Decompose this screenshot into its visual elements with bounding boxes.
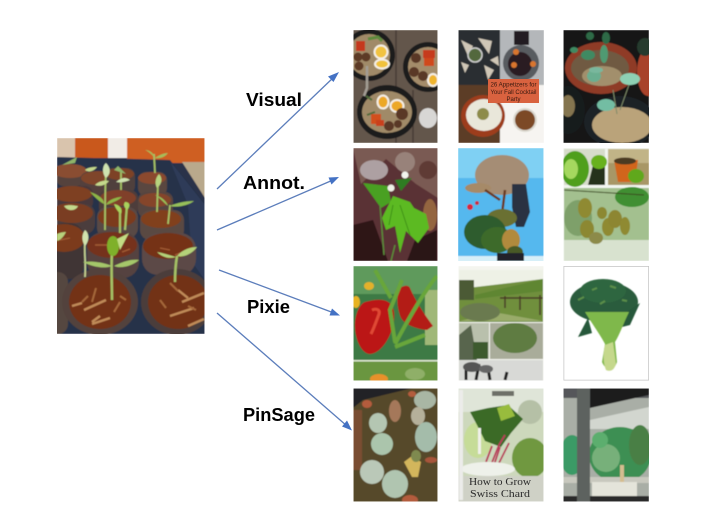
result photo: Pixie 1, red peppers: [352, 266, 438, 384]
figure: retrieval comparison: [57, 30, 649, 502]
appetizers title banner: Party: [506, 97, 521, 103]
result photo: Visual 3, sprouts in pots: [564, 30, 649, 143]
arrow: query to Visual results: [217, 72, 339, 189]
result photo: Annot. 2, bonsai on blue: [458, 148, 544, 262]
result photo: Pixie 3, broccoli on white: [564, 266, 649, 380]
result photo: Visual 1, food bowls: [354, 30, 438, 143]
arrow: query to PinSage results: [217, 313, 352, 430]
arrow: query to Annot. results: [217, 177, 339, 230]
chard title text: How to Grow: [469, 476, 531, 488]
appetizers title banner: 26 Appetizers for: [490, 82, 536, 88]
result photo: PinSage 3, indoor greens under light: [560, 388, 651, 502]
arrow: query to Pixie results: [219, 270, 340, 316]
result photo: PinSage 2, Swiss chard: [458, 388, 548, 502]
result photo: Annot. 3, kiwi collage: [561, 148, 649, 261]
label: Visual: Visual: [246, 89, 302, 110]
label: Pixie: Pixie: [247, 296, 290, 317]
result photo: Pixie 2, espalier collage: [458, 266, 544, 381]
appetizers title banner: Your Fall Cocktail: [490, 90, 536, 96]
result photo: Annot. 1, green leaf: [353, 148, 438, 261]
result photo: PinSage 1, cacti: [353, 388, 438, 505]
chard title text: [469, 478, 531, 497]
appetizers title banner: [488, 79, 539, 103]
label: Annot.: Annot.: [243, 172, 305, 193]
query photo: seedlings in peat pots: [57, 138, 204, 334]
chard title text: Swiss Chard: [470, 488, 531, 500]
label: PinSage: PinSage: [243, 404, 315, 425]
result photo: Visual 2, appetizers collage: [458, 30, 544, 143]
